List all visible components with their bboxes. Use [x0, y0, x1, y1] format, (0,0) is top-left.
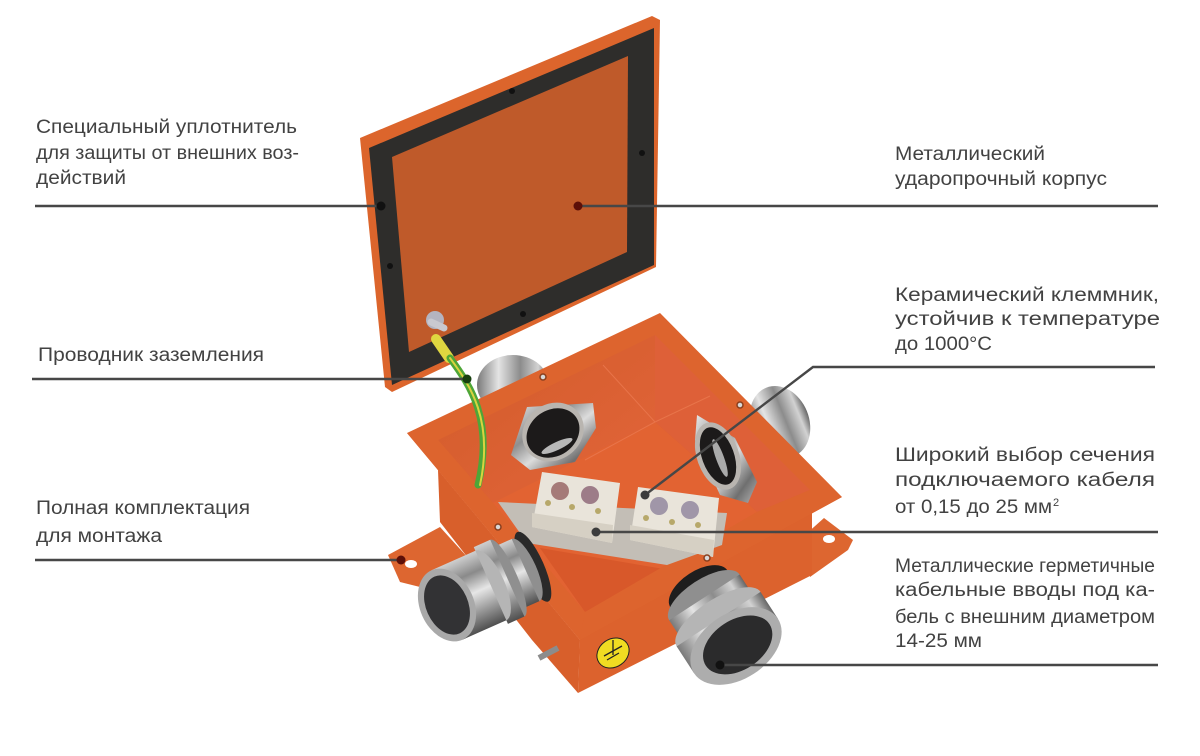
label: cable entries [895, 556, 1155, 652]
back cable gland left [477, 355, 549, 415]
leader line: cable section [592, 528, 1158, 536]
label: grounding conductor: Проводник заземления [38, 345, 264, 366]
label: sealant [36, 117, 299, 189]
front cable gland [647, 547, 796, 701]
rim [407, 313, 842, 640]
label: cable entries: кабельные вводы под ка- [895, 580, 1155, 601]
grounding wire [426, 311, 484, 485]
right box face [578, 510, 812, 693]
leader line: cable entries [716, 660, 1158, 670]
leader line: ceramic terminal [640, 367, 1155, 500]
right mounting ear [805, 518, 853, 577]
interior floor [493, 422, 757, 612]
label: mounting kit: Полная комплектация [36, 498, 250, 519]
front rim strips [407, 433, 585, 640]
label: cable section: Широкий выбор сечения [895, 445, 1155, 466]
leader line: body [574, 202, 1158, 210]
leader line: mounting kit [35, 556, 406, 564]
label: cable entries: бель с внешним диаметром [895, 607, 1155, 628]
terminal bracket [498, 502, 727, 565]
ear holes [405, 535, 835, 568]
interior right wall [655, 335, 810, 512]
leader line: sealant [35, 202, 386, 210]
interior left wall [438, 335, 655, 503]
label: ceramic terminal: устойчив к температуре [895, 309, 1160, 330]
label: cable section: подключаемого кабеля [895, 470, 1155, 491]
inner nut left [511, 391, 596, 473]
label: sealant: действий [36, 168, 126, 189]
earth bolt [539, 648, 558, 658]
back cable gland right [739, 377, 821, 467]
label: mounting kit: для монтажа [36, 526, 162, 547]
leader line: grounding conductor [32, 374, 472, 384]
ceramic terminal right [630, 487, 719, 557]
label: ceramic terminal [895, 285, 1160, 355]
label: metal body: Металлический [895, 144, 1045, 165]
junction box [388, 311, 853, 701]
label: metal body: ударопрочный корпус [895, 169, 1107, 190]
label: metal body [895, 144, 1107, 190]
left mounting ear [388, 527, 470, 587]
label: ceramic terminal: Керамический клеммник, [895, 285, 1159, 306]
label: sealant: для защиты от внешних воз- [36, 143, 299, 164]
lid [360, 16, 660, 392]
label: cable section: от 0,15 до 25 мм [895, 497, 1052, 518]
screw holes [495, 374, 743, 561]
interior creases [585, 365, 710, 460]
earth sticker [591, 632, 635, 674]
label: cable section [895, 445, 1155, 518]
left box face [438, 470, 580, 693]
label: mounting kit [36, 498, 250, 547]
label: sealant: Специальный уплотнитель [36, 117, 297, 138]
label: ceramic terminal: до 1000°С [895, 334, 992, 355]
label: cable section: 2 [1053, 497, 1059, 509]
inner nut right [686, 415, 757, 503]
left cable gland [405, 524, 560, 654]
label: cable entries: 14-25 мм [895, 631, 982, 652]
ceramic terminal left [532, 472, 620, 543]
label: cable entries: Металлические герметичные [895, 556, 1155, 577]
